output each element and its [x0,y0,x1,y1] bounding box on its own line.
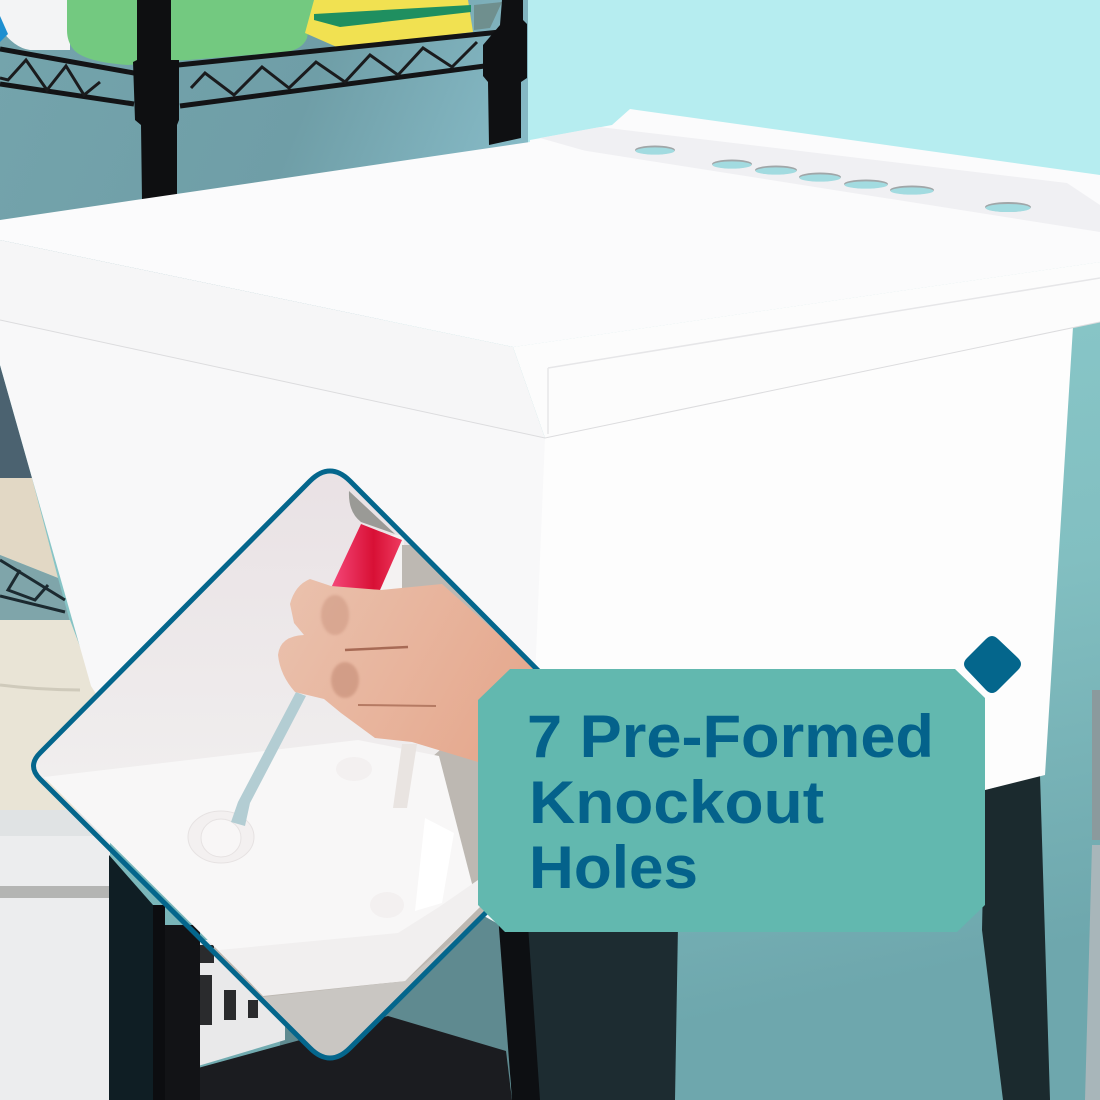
background wall: left [0,0,530,400]
sink base front side [219,880,480,996]
hole 1 [635,146,675,155]
middle sink leg [498,915,678,1100]
top rim surface [0,142,1100,347]
hole 5 [844,180,888,189]
wire shelf background [0,555,70,622]
hole 2 [712,160,752,169]
right post [483,0,527,145]
right sink leg [982,775,1050,1100]
pale object [1085,845,1100,1100]
hole 4 [799,172,841,182]
panel shape [478,669,985,932]
heading line 1: 7 Pre-Formed [527,703,934,770]
diamond inset photo [31,468,540,1060]
faucet strip [540,127,1100,233]
plastic wrap [474,2,502,30]
shelf rails left [0,49,134,104]
finger crease lower [358,705,436,706]
hole 7 [985,202,1031,212]
raised insert [415,818,454,911]
knockout circle inner [201,819,241,857]
knockout holes row [635,146,1031,212]
wire shelf [0,560,65,612]
lip edge shadow [0,320,1100,438]
bucket rim [0,810,110,836]
left post [133,0,179,200]
inset white column beside handle [380,535,404,595]
inset grey floor [214,545,533,998]
dark fabric [0,365,32,490]
screwdriver shaft [231,692,306,826]
heading line 2: Knockout [529,769,824,836]
knuckle shadow lower [331,662,359,698]
screwdriver handle lower [304,636,344,652]
laundry sink tub [0,109,1100,925]
left sink leg [109,855,153,1100]
shelf zigzag right [191,42,477,95]
knockout circle lower [370,892,404,918]
knuckle shadow upper [321,595,349,635]
small accent diamond [964,636,1021,693]
background wall: lower [0,320,1100,1100]
lip inset [548,278,1100,434]
basket holes [200,945,258,1025]
right lip [513,262,1100,438]
storage shelf with supplies [0,0,527,200]
cream towels [0,620,100,812]
lower shelf [198,1016,512,1100]
leg inner side [498,915,540,1100]
white bottle [0,0,70,50]
bucket band [0,886,110,898]
back deck [513,109,1100,347]
inset wall [36,474,439,780]
white bucket [0,810,110,1100]
background wall: upper right [528,0,1100,260]
screwdriver handle [331,524,402,590]
knockout circle upper [336,757,372,781]
blue bottle edge [0,16,8,42]
beige towel [0,478,58,578]
gap between legs [153,905,165,1100]
shelf post lower [165,925,200,1100]
tub left face [0,320,547,925]
green jug [67,0,314,65]
leg front [528,925,678,1100]
hole 3 [755,166,797,175]
hand [278,579,534,762]
right edge objects [1085,690,1100,1100]
towel fold [0,685,80,690]
screwdriver cap [349,491,395,534]
sink base top face [44,740,478,995]
diamond border [34,471,626,1058]
hole 6 [890,186,934,195]
sink base post [393,744,417,808]
inset lower floor [263,932,462,1056]
left lip [0,240,545,438]
fabric and towels at left [0,365,100,812]
heading line 3: Holes [529,834,698,901]
finger crease upper [345,647,408,650]
teal label panel [478,669,985,932]
sponge green stripe [314,5,471,27]
bucket body [0,832,110,1100]
tub right face [530,327,1073,800]
yellow sponges [305,0,473,48]
grey object [1092,690,1100,840]
shelf rails right [178,32,500,106]
knockout circle outer [188,811,254,863]
basket body [198,940,285,1066]
shelf zigzag left [0,60,100,95]
background wall: shadowed area under sink [280,900,510,1100]
laundry basket [198,940,285,1066]
